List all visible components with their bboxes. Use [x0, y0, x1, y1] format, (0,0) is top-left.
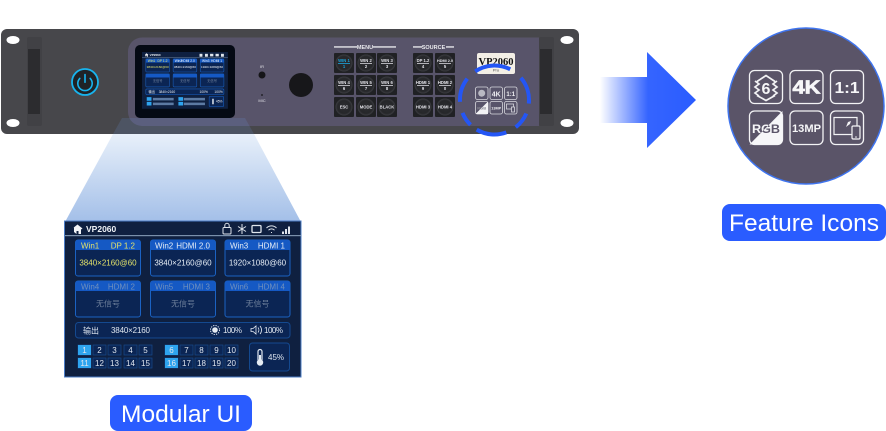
card Win6 [225, 281, 290, 317]
source heading: SOURCE [422, 45, 446, 51]
screen background [64, 221, 301, 377]
input number grid: 2 [97, 346, 102, 355]
touch screen thumbnail: 1920×1080@60 [201, 65, 223, 69]
input number grid: 13 [110, 359, 119, 368]
touch screen thumbnail: 无信号 [153, 78, 163, 83]
menu heading: MENU [357, 45, 373, 51]
menu and source button grid: ESC [340, 104, 348, 110]
card Win5 [150, 281, 216, 317]
menu and source button grid: 9 [422, 86, 425, 91]
icon: 6 layers: 6 [762, 81, 771, 98]
icon: 13MP [790, 111, 823, 144]
temperature card [250, 343, 290, 371]
touch screen thumbnail [135, 45, 235, 118]
temperature card: 45% [268, 353, 284, 362]
volume icon [251, 326, 262, 334]
output status bar: 100% [264, 326, 283, 335]
MIC sensor [258, 94, 266, 103]
input number grid: 5 [143, 346, 148, 355]
card Win3: 1920×1080@60 [229, 258, 287, 268]
input number grid: 19 [212, 359, 221, 368]
menu and source button grid: HDMI 2.0 [437, 59, 453, 63]
menu and source button grid: HDMI 2 [438, 80, 453, 85]
device: front panel rack unit [1, 29, 579, 134]
menu and source button grid: WIN 2 [360, 58, 372, 63]
card Win1: DP 1.2 [111, 241, 136, 250]
input number grid: 1 [82, 346, 87, 355]
right handle [539, 37, 554, 126]
input number grid [78, 345, 238, 368]
small feature icons on device: 1:1 [506, 92, 516, 98]
touch screen thumbnail: 无信号 [180, 78, 191, 83]
right mounting holes [560, 36, 574, 127]
input number grid: 14 [126, 359, 135, 368]
icon: 4K: 4K [792, 78, 820, 98]
input number grid: 10 [227, 346, 236, 355]
power button [72, 69, 98, 95]
label: Modular UI: Modular UI [121, 401, 241, 428]
input number grid: 6 [169, 346, 174, 355]
output status bar [76, 322, 290, 338]
small feature icons on device: RGB [477, 106, 486, 110]
control panel plate [128, 38, 539, 126]
input number grid: 12 [95, 359, 104, 368]
small feature icons on device: 13MP [491, 107, 502, 111]
menu and source button grid: 5 [444, 64, 447, 69]
menu and source button grid: WIN 1 [338, 58, 350, 63]
input number grid: 8 [199, 346, 204, 355]
card Win2 [150, 240, 216, 276]
VP2060 model badge: Pro [493, 68, 500, 72]
touch screen thumbnail: 100% [200, 90, 208, 94]
card Win4 [76, 281, 140, 317]
menu and source button grid: BLACK [380, 104, 394, 110]
status icons [223, 223, 289, 234]
input number grid: 20 [227, 359, 236, 368]
touch screen thumbnail: 45% [216, 100, 223, 104]
touch screen thumbnail: 输出 [149, 89, 155, 94]
menu and source button grid: 6 [343, 86, 346, 91]
input number grid: 16 [167, 359, 176, 368]
card Win5: Win5 [155, 282, 174, 291]
card Win5: 无信号 [171, 298, 195, 308]
rotary knob [289, 73, 313, 97]
menu and source button grid: WIN 4 [338, 80, 350, 85]
input number grid: 15 [141, 359, 150, 368]
menu and source button grid: MODE [360, 104, 372, 110]
enlarged feature icons circle [728, 28, 884, 184]
projection beam from screen to enlarged UI [65, 118, 301, 222]
card Win4: HDMI 2 [108, 282, 136, 291]
touch screen thumbnail: VP2060 [150, 53, 161, 57]
icon: 1:1: 1:1 [834, 80, 860, 97]
menu and source button grid: WIN 6 [381, 80, 393, 85]
status bar [65, 223, 301, 236]
touch screen thumbnail: HDMI 1 [211, 59, 222, 63]
label: Feature Icons [722, 204, 886, 241]
icon: RGB: RGB [752, 124, 780, 136]
menu and source button grid: 8 [386, 86, 389, 91]
menu and source button grid: HDMI 1 [416, 80, 431, 85]
card Win5: HDMI 3 [183, 282, 211, 291]
icon: screen and phone [830, 111, 864, 144]
small feature icons on device: 4K [492, 92, 501, 98]
input number grid: 9 [214, 346, 219, 355]
icon: 1:1 [830, 70, 864, 104]
menu heading [334, 45, 396, 51]
icon: 4K [790, 70, 823, 104]
source heading [413, 45, 454, 51]
touch screen thumbnail: 3840×2160@60 [174, 65, 196, 69]
card Win1 [76, 240, 140, 276]
touch screen thumbnail: Win3 [202, 59, 210, 63]
input number grid: 17 [182, 359, 191, 368]
icon: 6 layers [750, 70, 782, 104]
touch screen thumbnail: 3840×2160@60 [147, 65, 169, 69]
menu and source button grid: 2 [365, 64, 368, 69]
device chassis [1, 29, 579, 134]
menu and source button grid: 4 [422, 64, 425, 69]
touch screen thumbnail: DP 1.2 [158, 59, 168, 63]
enlarged modular UI screen [64, 221, 301, 377]
icon: 13MP: 13MP [792, 123, 821, 135]
brightness icon [210, 326, 220, 334]
icon: RGB [750, 111, 782, 144]
input number grid: 3 [112, 346, 117, 355]
menu and source button grid: 0 [444, 86, 447, 91]
arrow to feature icons [600, 52, 696, 148]
menu and source button grid: 1 [343, 64, 346, 69]
left mounting holes [6, 36, 20, 127]
menu and source button grid: 7 [365, 86, 368, 91]
card Win2: 3840×2160@60 [154, 258, 212, 268]
left handle [27, 37, 42, 126]
card Win6: Win6 [230, 282, 249, 291]
menu and source button grid: DP 1.2 [417, 58, 430, 63]
small feature icons on device [476, 87, 517, 114]
label: Modular UI [110, 395, 252, 431]
output status bar: 输出 [83, 326, 99, 336]
card Win3 [225, 240, 290, 276]
touch screen thumbnail: Win1 [148, 59, 155, 63]
menu and source button grid: 3 [386, 64, 389, 69]
menu and source button grid [334, 53, 455, 117]
menu and source button grid: HDMI 3 [416, 104, 431, 110]
card Win1: Win1 [81, 241, 100, 250]
card Win4: 无信号 [96, 298, 120, 308]
card Win2: HDMI 2.0 [176, 241, 211, 250]
window cards [76, 240, 290, 317]
IR sensor: IR [260, 64, 264, 69]
VP2060 model badge [477, 53, 515, 74]
touch screen thumbnail: Win2 [175, 59, 182, 63]
input number grid: 4 [128, 346, 133, 355]
touch screen thumbnail: 100% [214, 90, 223, 94]
touch screen thumbnail: 3840×2160 [159, 90, 175, 94]
input number grid: 7 [184, 346, 189, 355]
card Win6: 无信号 [246, 298, 270, 308]
input number grid: 11 [80, 359, 89, 368]
MIC sensor: MIC [258, 98, 266, 103]
touch screen thumbnail: HDMI 2.0 [181, 59, 195, 63]
label: Feature Icons: Feature Icons [729, 210, 879, 237]
menu and source button grid: HDMI 4 [438, 104, 453, 110]
card Win6: HDMI 4 [258, 282, 286, 291]
dashed highlight ring [460, 66, 529, 135]
card Win3: Win3 [230, 241, 249, 250]
card Win1: 3840×2160@60 [79, 258, 137, 268]
output status bar: 100% [223, 326, 242, 335]
icon: RGB: RGB [752, 124, 780, 136]
card Win3: HDMI 1 [258, 241, 286, 250]
touch screen thumbnail: 无信号 [207, 78, 218, 83]
menu and source button grid: WIN 3 [381, 58, 393, 63]
IR sensor [258, 64, 266, 78]
card Win4: Win4 [81, 282, 100, 291]
card Win2: Win2 [155, 241, 174, 250]
VP2060 model badge: VP2060 [478, 57, 514, 68]
status bar: VP2060 [86, 224, 117, 234]
input number grid: 18 [197, 359, 206, 368]
output status bar: 3840×2160 [111, 326, 151, 335]
menu and source button grid: WIN 5 [360, 80, 372, 85]
